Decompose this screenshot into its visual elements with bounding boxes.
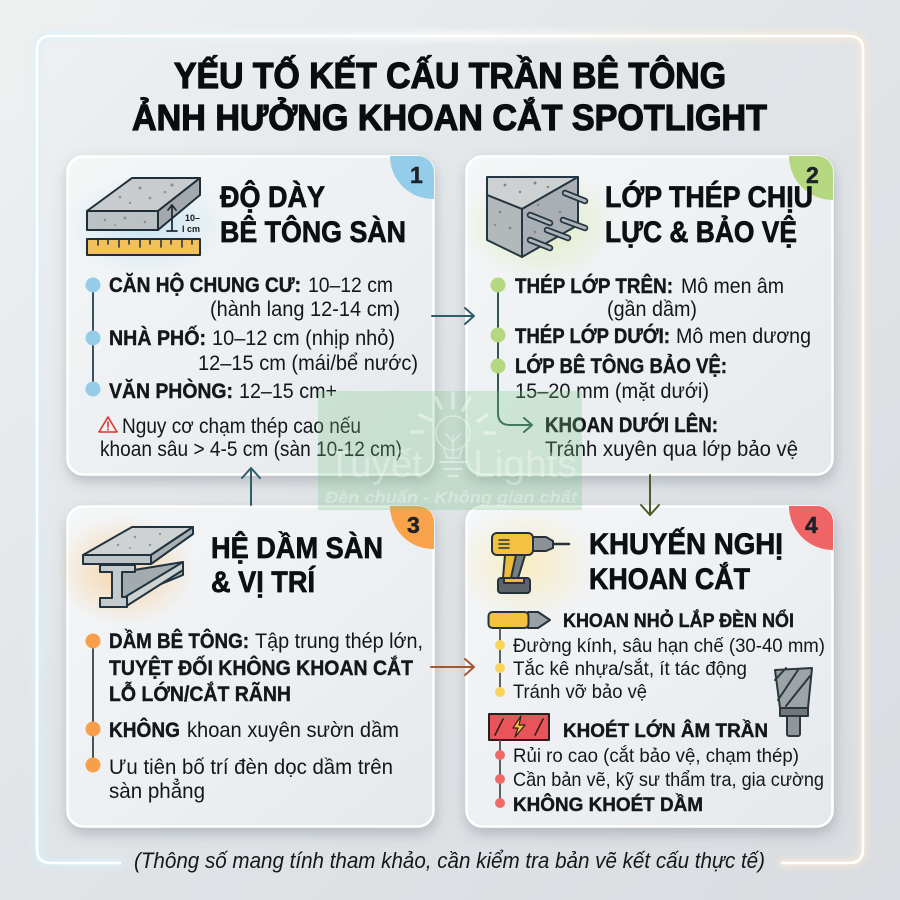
text block: beam rules: khoan xuyên sườn dầm: [187, 719, 399, 742]
text block: steel layers: Mô men dương: [676, 325, 811, 348]
icon: warning: [99, 417, 117, 432]
badge 2: [789, 156, 833, 200]
title: ẢNH HƯỞNG KHOAN CẮT SPOTLIGHT: [132, 96, 767, 138]
badge 4: 4: [805, 512, 818, 538]
heading: HỆ DẦM SÀN: [211, 531, 383, 565]
badge 3: [390, 506, 434, 549]
heading: [211, 531, 383, 599]
text block: beam rules: sàn phẳng: [109, 779, 205, 803]
icon: concrete slab and ruler: 10–: [185, 213, 200, 223]
heading: KHOAN CẮT: [589, 562, 750, 596]
icon: core bit: [775, 668, 812, 736]
panel: khuyến nghị khoan cắt: [459, 505, 840, 840]
icon: beam and slab: [83, 527, 193, 607]
badge 4: [789, 506, 833, 550]
warning text: [100, 415, 402, 461]
icon: cordless drill: [492, 533, 569, 593]
text block: small drilling: [513, 635, 825, 703]
text block: thicknesses: 10–12 cm (nhịp nhỏ): [212, 327, 395, 350]
text block: thicknesses: (hành lang 12-14 cm): [210, 298, 400, 321]
text block: thicknesses: [109, 273, 418, 403]
icon: concrete slab and ruler: [87, 178, 200, 255]
arrow: card 1 to card 2: [432, 308, 474, 324]
text block: beam rules: TUYỆT ĐỐI KHÔNG KHOAN CẮT: [109, 656, 413, 680]
text block: large cutting: Rủi ro cao (cắt bảo vệ, chạm thép): [513, 744, 799, 767]
text block: steel layers: Mô men âm: [681, 275, 784, 298]
arrow: card 2 to card 4: [641, 475, 659, 515]
title: [132, 54, 767, 138]
heading: LỚP THÉP CHỊU: [605, 180, 813, 214]
text block: thicknesses: NHÀ PHỐ:: [109, 326, 206, 350]
arrow: card 3 to card 4: [431, 659, 474, 675]
text block: beam rules: Tập trung thép lớn,: [255, 630, 423, 653]
text block: steel layers: (gần dầm): [607, 298, 697, 321]
badge 2: 2: [806, 162, 819, 188]
text block: thicknesses: CĂN HỘ CHUNG CƯ:: [109, 273, 301, 297]
timeline connector arrow: [490, 278, 532, 432]
text block: steel layers: Tránh xuyên qua lớp bảo vệ: [545, 438, 798, 461]
text block: steel layers: THÉP LỚP TRÊN:: [515, 274, 673, 298]
text block: steel layers: [515, 274, 811, 461]
heading: KHUYẾN NGHỊ: [589, 527, 783, 561]
text block: beam rules: KHÔNG: [109, 718, 180, 742]
panel: độ dày bê tông sàn: [60, 154, 442, 488]
title: YẾU TỐ KẾT CẤU TRẦN BÊ TÔNG: [174, 54, 726, 96]
badge 1: [390, 156, 434, 199]
text block: thicknesses: 12–15 cm+: [239, 380, 337, 403]
timeline dots: small drilling: [495, 628, 505, 697]
badge 3: 3: [407, 512, 420, 538]
watermark: [318, 391, 582, 510]
text block: beam rules: DẦM BÊ TÔNG:: [109, 629, 249, 653]
small drilling heading: KHOAN NHỎ LẮP ĐÈN NỔI: [563, 608, 794, 632]
text block: thicknesses: VĂN PHÒNG:: [109, 379, 233, 403]
heading: & VỊ TRÍ: [211, 565, 316, 599]
icon: small bit: [488, 612, 550, 628]
timeline dots: [86, 634, 100, 772]
heading: [589, 527, 783, 596]
heading: ĐỘ DÀY: [220, 180, 325, 214]
timeline dots: [86, 278, 100, 396]
text block: steel layers: THÉP LỚP DƯỚI:: [515, 324, 670, 348]
watermark: Tuyết: [328, 444, 423, 486]
text block: thicknesses: 12–15 cm (mái/bể nước): [198, 352, 418, 375]
heading: [220, 180, 406, 249]
panel: lớp thép chịu lực và bảo vệ: [460, 155, 841, 488]
heading: LỰC & BẢO VỆ: [605, 215, 797, 249]
badge 1: 1: [410, 162, 423, 188]
text block: steel layers: KHOAN DƯỚI LÊN:: [545, 413, 718, 437]
text block: small drilling: Tắc kê nhựa/sắt, ít tác động: [513, 657, 747, 680]
icon: large cutting warning box: [489, 714, 549, 740]
timeline dots: large cutting: [495, 740, 505, 808]
panel: hệ dầm sàn và vị trí: [59, 505, 442, 840]
large cutting heading: KHOÉT LỚN ÂM TRẦN: [563, 718, 768, 742]
watermark: Lights: [473, 444, 577, 486]
warning text: Nguy cơ chạm thép cao nếu: [122, 415, 361, 438]
heading: BÊ TÔNG SÀN: [220, 215, 406, 249]
text block: small drilling: Đường kính, sâu hạn chế (30-40 mm): [513, 635, 825, 657]
heading: [605, 180, 813, 249]
text block: large cutting: Cần bản vẽ, kỹ sư thẩm tra, gia cường: [513, 769, 824, 791]
text block: small drilling: Tránh vỡ bảo vệ: [513, 681, 647, 703]
text block: thicknesses: 10–12 cm: [308, 274, 393, 297]
icon: concrete slab and ruler: I cm: [182, 224, 200, 234]
text block: large cutting: KHÔNG KHOÉT DẦM: [513, 792, 703, 816]
arrow: card 3 to card 1: [242, 468, 260, 505]
watermark: Đèn chuẩn - Không gian chất: [325, 488, 578, 507]
text block: steel layers: LỚP BÊ TÔNG BẢO VỆ:: [515, 354, 727, 378]
warning text: khoan sâu > 4-5 cm (sàn 10-12 cm): [100, 438, 402, 461]
text block: beam rules: LỖ LỚN/CẮT RÃNH: [109, 682, 291, 706]
text block: large cutting: [513, 744, 824, 816]
text block: beam rules: [109, 629, 423, 803]
icon: concrete block with rebar: [487, 177, 585, 257]
footnote: (Thông số mang tính tham khảo, cần kiểm tra bản vẽ kết cấu thực tế): [134, 848, 765, 873]
text block: beam rules: Ưu tiên bố trí đèn dọc dầm trên: [109, 756, 393, 779]
text block: steel layers: 15–20 mm (mặt dưới): [515, 380, 709, 403]
